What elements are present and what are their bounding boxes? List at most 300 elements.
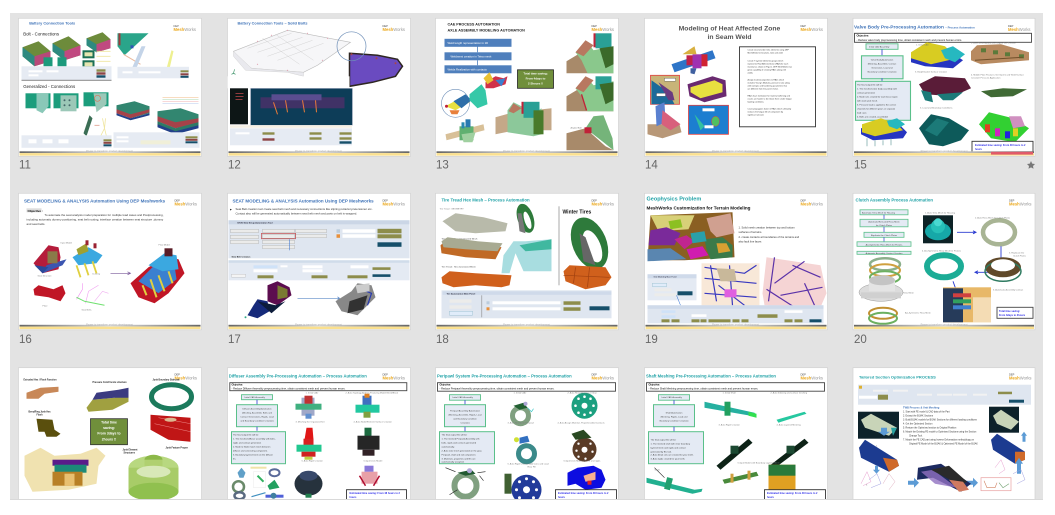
- text box: HAZs have inclination for material softening and: [748, 94, 790, 97]
- process text: 3. Build BIJAK models for BIJAK Sections for different loading conditions: [903, 419, 978, 422]
- exploded clutch: Axi-Symmetric Hexa Mesh: [905, 311, 932, 314]
- text box: with isotropic and hardening parameters that: [748, 84, 787, 87]
- text box: are different from the parent metal.: [748, 87, 779, 90]
- logo: DEP: [382, 198, 388, 202]
- flow boxes: contact generated.: [857, 91, 876, 94]
- process text: 6. Morph the Existing FE model to Optimized Sections using the Section: [903, 431, 977, 434]
- slide 22: diffuser: [228, 368, 410, 506]
- logo: DEP: [174, 373, 180, 377]
- logo: DEP: [382, 373, 388, 377]
- text box: welds.: [748, 72, 754, 74]
- logo: MeshWorks: [800, 201, 823, 206]
- slide number 13: 13: [436, 160, 449, 172]
- flow boxes: layered mesh and rigids and contact: [650, 447, 686, 450]
- logo: MeshWorks: [382, 201, 405, 206]
- flow boxes: 1. The meshed Peripawl Assembly with: [442, 438, 480, 441]
- logo: [592, 198, 614, 206]
- generalized connections heading: Generalized - Connections: [23, 84, 76, 89]
- slide 17: seat belt tool: [228, 193, 410, 330]
- total time saving box: [518, 70, 554, 88]
- dark maroon model: [919, 76, 971, 102]
- gear five blue: [504, 474, 542, 505]
- logo: DEP: [592, 198, 597, 202]
- bolted modules: [22, 32, 110, 68]
- footer: Power to transform product development: [712, 149, 759, 153]
- footer: Power to transform product development: [86, 322, 133, 326]
- shaft one: [704, 402, 756, 418]
- labels: Junk Boundary Sidecoat: [152, 379, 180, 382]
- flow boxes: 1. The meshed diffuser assembly with bolts,: [233, 438, 276, 441]
- scroll indicator: [10, 498, 1043, 501]
- dark diffuser: [358, 428, 380, 456]
- logo: MeshWorks: [174, 201, 197, 206]
- slide 18: tire tread: [436, 193, 618, 330]
- flow boxes: (Meshing, Assemble, Bolts and: [242, 412, 273, 415]
- housing teal model: [923, 211, 956, 243]
- slide 14 title: [679, 25, 781, 41]
- logo: DEP: [592, 373, 597, 377]
- slide 16 title: SEAT MODELING & ANALYSIS Automation Using DEP Meshworks: [24, 198, 166, 203]
- labels: Extruded Hex / Flash Function: [24, 379, 57, 382]
- assembled section: [943, 287, 1024, 322]
- slide number 18: 18: [436, 334, 449, 346]
- slide number 17: 17: [228, 334, 241, 346]
- slide 12 title: Battery Connection Tools – Solid Bolts: [238, 21, 307, 25]
- slide 15: valve body: [853, 18, 1035, 156]
- flow boxes: Weldment creation in Tetra mesh: [450, 54, 492, 58]
- flow boxes: rigids and contact generated.: [233, 442, 262, 445]
- process text: 4. Get the Optimized Section: [903, 423, 933, 426]
- captions: 4. Middle Plate Features Set Imprint and Weld Surface: [971, 73, 1025, 76]
- green cylinder: [128, 455, 178, 501]
- gear two: [572, 393, 598, 419]
- shaft four dark: [770, 439, 808, 470]
- captions: 4. Auto Assign Material, Properties And Contacts: [558, 422, 605, 425]
- assembled section: 5. Automatic Assembly Contact: [993, 288, 1024, 291]
- captions: [915, 41, 1025, 109]
- flow boxes: Initial CAD Assembly: [452, 396, 474, 399]
- captions: 5. Auto Rigid Creation: [302, 460, 324, 463]
- process text: TWB Process & Unit Meshing: [903, 406, 940, 410]
- flow boxes: [856, 44, 910, 120]
- logo: DEP: [174, 24, 179, 28]
- logo: DEP: [592, 24, 597, 28]
- winter tires divider: [558, 206, 560, 285]
- final seat model: Final Model: [158, 244, 170, 246]
- flow boxes: fin.: [233, 459, 236, 461]
- part icons: [233, 467, 284, 499]
- flow boxes: Peripawl Assembly Automation: [450, 410, 481, 413]
- captions: [296, 392, 399, 463]
- slide 19 title: Geophysics Problem: [646, 196, 701, 202]
- tire labels: [440, 207, 478, 268]
- flow boxes: 1. The meshed shaft with inner boundary: [650, 443, 691, 446]
- flow boxes: Weld length representation in 1D: [448, 41, 488, 45]
- footer: Power to transform product development: [921, 322, 968, 326]
- wire profiles left: [861, 472, 895, 490]
- layered stacks: [116, 101, 198, 134]
- terrain tool panel: [648, 305, 824, 323]
- blue arrows: [873, 428, 1027, 488]
- logo: DEP: [1009, 373, 1015, 377]
- automation panel: Tire Automation Main Panel: [446, 292, 476, 295]
- flow boxes: Initial CAD Assembly: [869, 45, 890, 48]
- number markers: 1: [876, 446, 878, 448]
- replicated plates: 3. Replicate the: [1009, 251, 1025, 254]
- text box: loading conditions.: [748, 100, 765, 103]
- captions: Output Deck Model with 9G and rigids: [564, 460, 601, 463]
- quad tread: [440, 237, 502, 259]
- process text: 2. Extract the BIJAK Sections: [903, 415, 934, 418]
- colour seat model: [244, 281, 292, 318]
- brown extrusion: [26, 387, 58, 399]
- process text: [903, 406, 978, 446]
- flow boxes: Contact Generations, Rigids, Load: [240, 416, 274, 419]
- dummy model: Dummy: [92, 273, 101, 275]
- captions: 3. Auto Hex Mesh Peripawl: [508, 422, 534, 425]
- captions: 3. Meshing the Organized Set: [296, 421, 325, 424]
- weld views right: Angled Bolt: [570, 126, 582, 129]
- white backing: [228, 76, 350, 88]
- flow boxes: (Meshing, Assemble, Rigids, Load: [448, 414, 482, 417]
- seam weld axle: [672, 46, 716, 74]
- logo: MeshWorks: [592, 376, 614, 381]
- teal bracket: [118, 33, 174, 73]
- slide number 19: 19: [645, 334, 658, 346]
- objective box: [230, 383, 407, 391]
- flow boxes: The final output file will be:: [233, 434, 259, 437]
- slide 20: clutch assembly: [853, 193, 1035, 330]
- purple tray: [350, 53, 402, 86]
- deck blue: [568, 466, 606, 490]
- stress contour: [688, 105, 728, 134]
- slide number 16: 16: [19, 334, 32, 346]
- logo: DEP: [1008, 24, 1014, 28]
- clutch plate ring: [975, 216, 1015, 244]
- time saving box: [346, 490, 406, 502]
- flow boxes: 2. Node sets created for each boss region: [857, 95, 898, 98]
- text box: material as shown in Figure. DEP MeshWorks has: [748, 65, 792, 68]
- replicated plates: [985, 251, 1027, 281]
- flow boxes: with wash pick mesh.: [857, 99, 878, 102]
- bullet text: Seat Belt creation tool create seat belt mesh and necessary connections like slipring,retractor,pretensioner etc..: [236, 207, 373, 211]
- logo: MeshWorks: [382, 376, 405, 381]
- flow boxes: Welds Realization with contacts: [448, 67, 487, 71]
- captions: 4. Auto Layered Meshing: [776, 424, 801, 427]
- flow boxes: Boundary Condition Creation): [660, 420, 689, 423]
- tire labels: Tire Tread : GEOMETRY: [440, 207, 464, 210]
- objective text: To automate the seat analysis model preparation for multiple load cases and Postprocessing,: [44, 213, 164, 217]
- output deck red model: [360, 466, 380, 486]
- slide 12: solid bolts: [228, 18, 410, 156]
- flow boxes: 2. Node to Node match mesh between: [233, 446, 271, 449]
- objective box: - Reduce Diffuser Assembly preprocessing time, obtain consistent mesh and prevent human errors.: [232, 387, 346, 391]
- flow chart: for Clutch Plates: [876, 224, 893, 227]
- objective box: [646, 383, 824, 391]
- logo: [174, 24, 196, 32]
- shaft three dark: [716, 439, 752, 470]
- flow boxes: The final output file will be:: [442, 434, 468, 437]
- fem view right: [989, 407, 1019, 433]
- logo: [592, 373, 614, 381]
- captions: 2. Auto Hexa Meshing of Gear: [568, 392, 597, 395]
- flow boxes: [440, 395, 494, 464]
- weld ring: [688, 76, 726, 102]
- objective box: Objective:: [440, 384, 451, 387]
- bottom white strip: [0, 500, 1055, 515]
- captions: 1. Initial Shaft: [722, 392, 736, 395]
- time saving box: hours: [767, 496, 775, 499]
- flow boxes: and Boundary Condition: [453, 418, 478, 421]
- logo: MeshWorks: [800, 27, 823, 32]
- dummy model: [72, 240, 102, 277]
- flow boxes: 3. Pressure load is applied to the correct: [857, 103, 897, 106]
- logo: DEP: [1009, 198, 1015, 202]
- objective text: Objective :: [28, 209, 43, 213]
- dark teal mesh: [919, 114, 969, 146]
- bolt markers: [350, 53, 396, 64]
- objective box: [854, 33, 1032, 42]
- labels: Junk Element: [122, 449, 138, 452]
- captions: 5. Load and Boundary Conditions: [920, 106, 953, 109]
- flow chart: Replicate the Clutch Plates: [871, 234, 898, 237]
- shaft bottom left: [646, 468, 702, 494]
- arrow: [298, 297, 340, 300]
- process text: 5. Restore the Optimized section to Original Position: [903, 427, 957, 430]
- time saving box: [972, 141, 1033, 152]
- total time saving box: Total time saving:: [523, 71, 548, 75]
- labels: Flash: [36, 415, 43, 417]
- objective text: including automatic dummy positioning, seat belt routing, interface creation between seat structure ,dummy: [26, 217, 164, 221]
- slide 22 title: Diffuser Assembly Pre-Processing Automation – Process Automation: [229, 374, 367, 379]
- time saving box: [997, 307, 1033, 318]
- slide 18 title: Tire Tread Hex Mesh – Process Automation: [442, 197, 530, 202]
- bolt connections heading: Bolt - Connections: [23, 31, 60, 36]
- rainbow lines: [162, 97, 198, 103]
- slide 25 title: Tailored Section Optimization PROCESS: [859, 375, 936, 380]
- red tire: [150, 415, 190, 442]
- tool panel bolts right: [118, 67, 189, 78]
- time saving box: Estimated time saving: From 48 hours to 2: [767, 492, 818, 495]
- hex tread: [442, 271, 512, 287]
- weld block: [648, 102, 682, 138]
- bullet text: ►: [230, 207, 232, 211]
- shaft two: [776, 412, 806, 423]
- logo: [800, 24, 823, 32]
- diffuser model top: [296, 396, 322, 419]
- logo: [1009, 198, 1032, 206]
- section optimized: [917, 464, 971, 492]
- exploded clutch: Tetra Mesh: [903, 291, 915, 294]
- flow boxes: 2. Auto bleak sets are created for your teeth.: [650, 454, 694, 457]
- tire labels: Tire Tread : Hex dominated Mesh: [442, 265, 476, 268]
- winter hex tread: [564, 265, 612, 289]
- gear three: [514, 436, 534, 462]
- flow chart: [857, 210, 911, 255]
- slide 13 heading: [448, 22, 525, 32]
- time saving box: hours: [558, 496, 566, 499]
- footer: Power to transform product development: [295, 149, 342, 153]
- logo: MeshWorks: [1009, 201, 1032, 206]
- gear one: [512, 402, 534, 424]
- process text: Original FE Model of the BIJAK & Optimized FE Model of the BIJAK: [909, 443, 978, 446]
- weld closeup centre: [496, 102, 552, 138]
- flow boxes: 1. The meshed valve body assembly with: [857, 87, 898, 90]
- slide 16: seat modeling: [18, 193, 202, 330]
- flow boxes: Shaft Automation: [666, 412, 683, 415]
- seat belt creation label: Seat Belt Creation: [232, 255, 251, 258]
- replicated plates: Clutch Plates: [1013, 254, 1027, 257]
- logo: MeshWorks: [174, 376, 197, 381]
- total time saving box: [90, 419, 128, 445]
- slide 11 title: Battery Connection Tools: [29, 21, 75, 25]
- captions: [508, 392, 605, 469]
- mini panel: Grid Modeling Main Panel: [654, 276, 677, 278]
- teal ring: [152, 385, 192, 409]
- final seat model: [130, 244, 184, 303]
- logo: MeshWorks: [592, 201, 614, 206]
- flow boxes: Generation, Load and: [871, 66, 893, 69]
- seat belts: [76, 283, 108, 311]
- arrows: [953, 231, 1002, 292]
- flow boxes: Boundary Condition Creation): [868, 70, 897, 73]
- terrain notes: [738, 225, 800, 243]
- olive flash part: [36, 419, 60, 437]
- text box: reduces the fatigue life of component by: [748, 110, 783, 113]
- flow boxes: generated by BC tool.: [650, 451, 672, 454]
- number markers: [866, 446, 932, 487]
- total time saving box: 2hours !!: [102, 438, 116, 442]
- turquoise tire section: [502, 239, 552, 273]
- gear four: [572, 430, 596, 462]
- captions: 3. Body/Gasket Surface Creation: [915, 70, 948, 73]
- number markers: 3: [866, 485, 868, 487]
- flow boxes: Valve Body Automation: [871, 58, 894, 61]
- flow chart: Axi-Symmetric Hexa Mesh for Pistons: [866, 243, 903, 246]
- text box: Create second order tetra elements using DEP: [748, 48, 790, 51]
- time saving box: From 3days to 2hours: [999, 314, 1026, 317]
- tire labels: Tire Tread : Quad dominated Mesh: [442, 237, 478, 240]
- captions: 4. Auto Node/Element Surface Creation: [354, 421, 393, 424]
- seat structure: Input Model: [60, 241, 72, 244]
- bolted diffuser: [294, 471, 322, 498]
- text box: [740, 47, 816, 127]
- text box: great capability of creating HAZs along with: [748, 68, 786, 71]
- bullet text: [230, 207, 373, 215]
- close-up red frame: [650, 75, 680, 104]
- tool strip: [230, 125, 352, 145]
- process text: Change Tool.: [909, 436, 923, 438]
- number markers: 2: [930, 477, 932, 479]
- slide 25: tailored section: [853, 368, 1035, 506]
- terrain notes: 1. Solid mesh creation between top and bottom: [738, 225, 795, 229]
- slide 14 title: in Seam Weld: [707, 34, 752, 41]
- captions: Creation/ Pressure Application: [971, 76, 1001, 79]
- total time saving box: 2 Shours !!: [528, 81, 543, 85]
- slide 13: axle assembly: [436, 18, 618, 156]
- captions: 1. Initial CAD: [916, 43, 929, 46]
- total time saving box: saving:: [103, 426, 115, 430]
- labels: Junk Feature Proper: [166, 447, 188, 450]
- logo: [1008, 24, 1031, 32]
- logo: MeshWorks: [800, 376, 823, 381]
- objective box: - Reduce valve body preprocessing time, obtain consistent mesh and prevent human errors.: [856, 38, 962, 42]
- flow boxes: bolts, rigids and contacts generated: [442, 442, 477, 445]
- flow boxes: 3. Auto rigids created for your teeth.: [650, 458, 686, 461]
- colourful loads: [979, 112, 1029, 142]
- slide 13 heading: CAE PROCESS AUTOMATION: [448, 22, 500, 26]
- flow boxes: automatically assigned.: [442, 461, 465, 464]
- time saving box: Total time saving:: [999, 310, 1020, 313]
- floor: [34, 285, 66, 307]
- torus: [922, 249, 962, 277]
- labels: Bevy/Ring Junk Hex: [28, 412, 51, 414]
- valve assembly bottom left: [861, 118, 907, 146]
- fault map two: [762, 257, 826, 307]
- close-up: [768, 465, 796, 490]
- total time saving box: Total time: [101, 421, 117, 425]
- brown casting: [971, 44, 1029, 64]
- weld views right: [566, 33, 614, 150]
- captions: Output Deck Model: [364, 460, 383, 463]
- slide 14: heat affected zone: [644, 18, 828, 156]
- labels: Structures: [124, 452, 136, 455]
- bottom left gear: [446, 468, 486, 497]
- slide 14 title: Modeling of Heat Affected Zone: [679, 25, 781, 32]
- tool panel stacks: [114, 132, 200, 148]
- diffuser model top right: [356, 394, 380, 418]
- labels: Pressure Comb'ncole structure: [92, 381, 127, 384]
- software viewport: [230, 88, 352, 125]
- flow boxes: [232, 395, 286, 464]
- red profile box: [981, 478, 1011, 491]
- time saving box: hours: [350, 496, 357, 499]
- logo: [382, 24, 405, 32]
- flow boxes: and Boundary Condition Creation): [240, 420, 274, 423]
- labels: [24, 379, 188, 455]
- flow boxes: Peripawl, shaft and rod component.: [442, 454, 476, 457]
- slide 24: shaft meshing: [644, 368, 828, 506]
- time saving box: hours: [975, 148, 983, 151]
- slide 13 heading: AXLE ASSEMBLY MODELING AUTOMATION: [448, 28, 525, 32]
- slide number 20: 20: [854, 334, 867, 346]
- slide 11: battery connection tools: [18, 18, 202, 156]
- logo: MeshWorks: [382, 27, 405, 32]
- logo: [1009, 373, 1032, 381]
- time saving box: [556, 490, 616, 502]
- flow boxes: The final output file will be:: [857, 83, 883, 86]
- objective box: Objective:: [648, 384, 660, 387]
- logo: MeshWorks: [1009, 376, 1032, 381]
- captions: 5. Auto Rigid Creation Add Cons and Load: [508, 463, 549, 466]
- tool panel: DT20 Seat Setup Automation Tool: [238, 221, 273, 224]
- seat structure: [34, 241, 72, 277]
- yellow valve model: [911, 42, 965, 68]
- flow chart: Automatic Assembly Contact Creation: [866, 252, 903, 255]
- flow boxes: 3. Materials, properties and BC are: [442, 458, 476, 461]
- captions: 3. Auto Rigid Creation: [718, 424, 741, 427]
- slide number 11: 11: [19, 160, 31, 172]
- captions: 2. Auto Indexing and surface meshing: [770, 392, 808, 395]
- logo: DEP: [800, 198, 806, 202]
- process text: 7. Morph the FE CAD part using Inverse Deformation methodology on: [903, 439, 975, 442]
- slide number 12: 12: [228, 160, 241, 172]
- logo: MeshWorks: [1008, 27, 1031, 32]
- footer: Power to transform product development: [503, 322, 550, 326]
- arrow: [110, 272, 130, 275]
- flow boxes: Diffuser Assembly Automation: [242, 408, 272, 411]
- text box: includes Young's Modulus, poisson's ratio along: [748, 81, 790, 84]
